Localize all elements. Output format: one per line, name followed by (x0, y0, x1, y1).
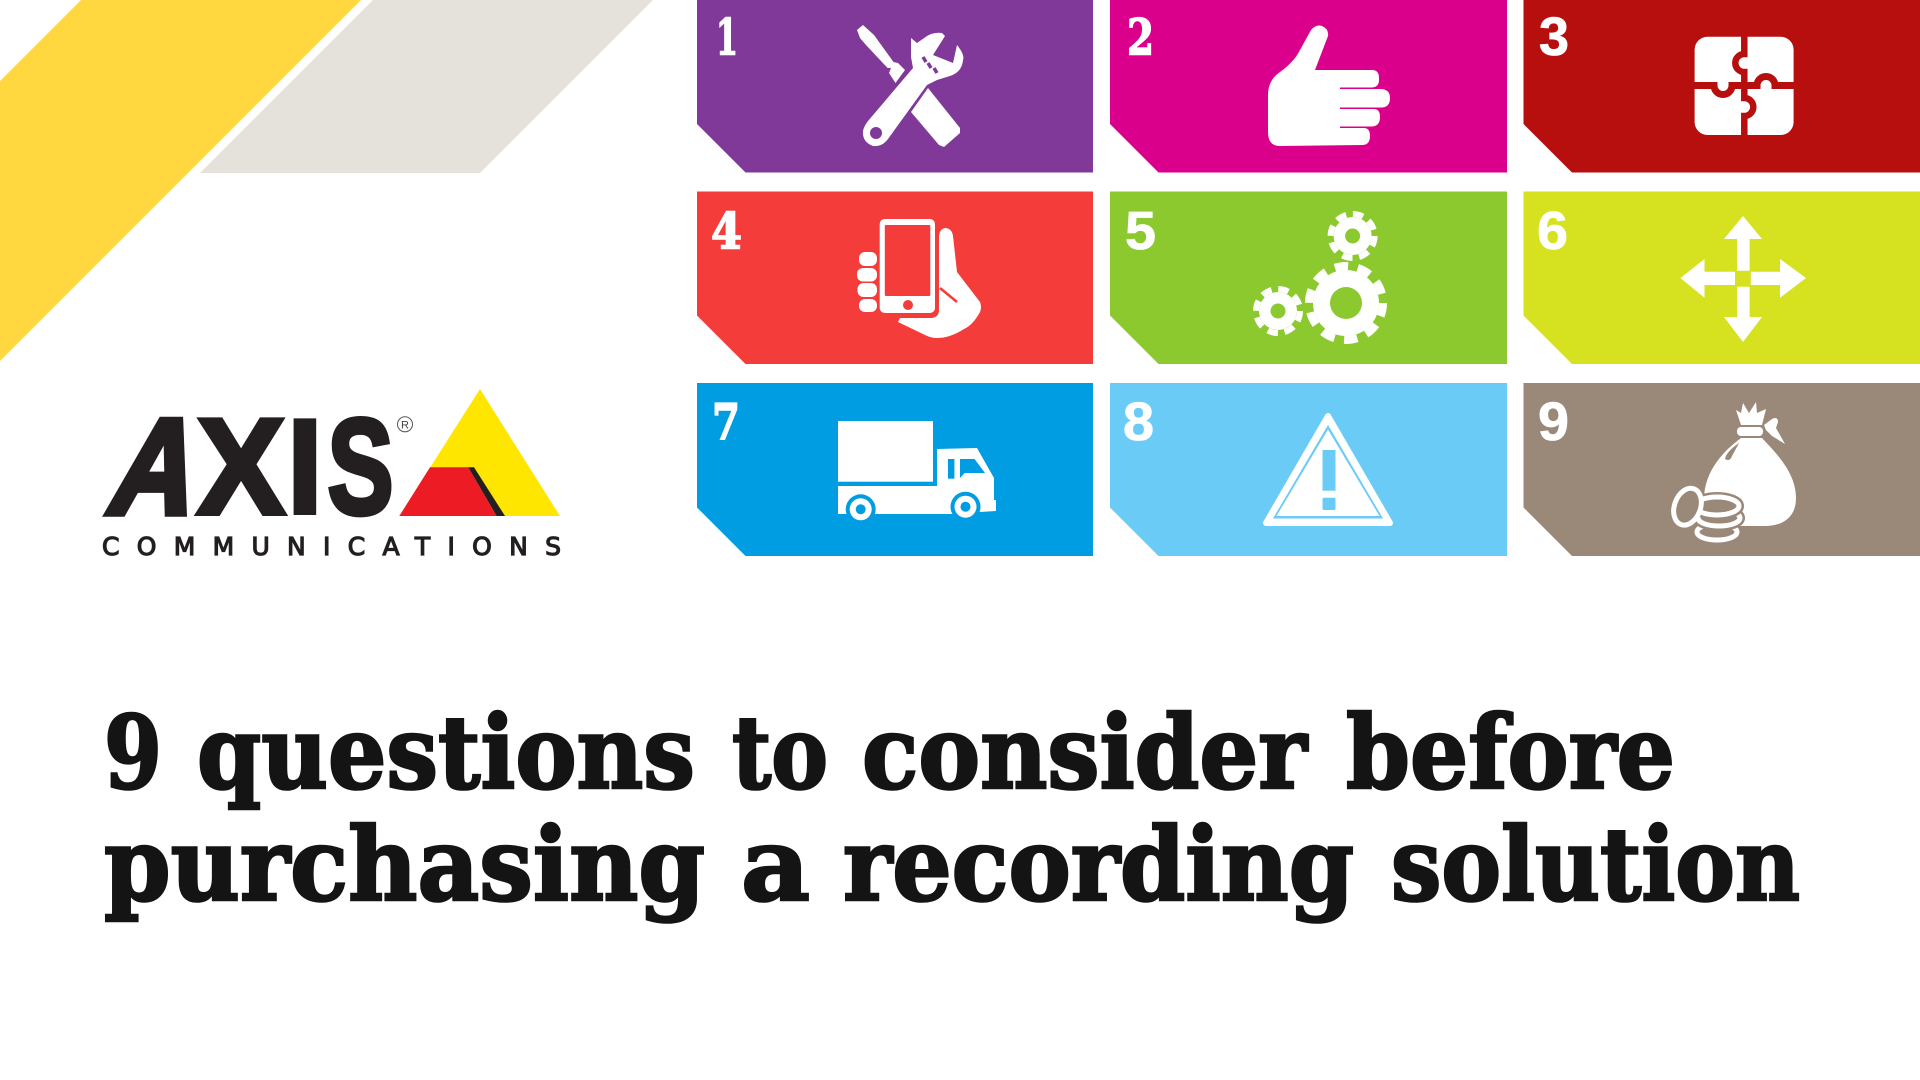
icon: thumb up hand (1268, 26, 1390, 146)
tile 5: gears (1110, 192, 1507, 364)
title line 2: recording (843, 805, 1354, 924)
icon: hand holding phone (857, 219, 981, 338)
icon: wrench and screwdriver (857, 25, 963, 147)
logo wordmark: I (286, 390, 324, 542)
logo triangle (399, 389, 560, 516)
title (104, 693, 1800, 924)
title line 2: purchasing (104, 805, 705, 924)
title line 1: consider (862, 693, 1309, 812)
logo: Axis Communications (96, 389, 561, 561)
yellow diagonal band (0, 0, 361, 361)
grey diagonal band (200, 0, 653, 173)
icon: truck (838, 421, 996, 524)
registered mark (398, 417, 412, 432)
number 6: 6 (1537, 201, 1568, 261)
title line 2: solution (1391, 805, 1800, 924)
logo wordmark: X (197, 390, 285, 542)
icon: puzzle pieces (1694, 36, 1794, 135)
number 9: 9 (1538, 392, 1569, 452)
registered mark: R (401, 420, 409, 432)
title line 2 (104, 805, 1800, 924)
title line 1: to (732, 693, 828, 812)
title line 1 (104, 693, 1675, 812)
title line 1: questions (197, 693, 695, 812)
title line 1: before (1346, 693, 1675, 812)
icon: warning triangle (1266, 416, 1390, 523)
icon: four-way arrows (1680, 216, 1806, 342)
logo wordmark: S (328, 390, 394, 542)
tile 2: thumbs up (1110, 0, 1507, 172)
tile 3: puzzle (1524, 0, 1920, 172)
number 1: 1 (716, 8, 738, 66)
icon: three gears (1256, 214, 1383, 340)
number 7: 7 (712, 392, 740, 452)
number 4: 4 (711, 202, 742, 260)
tile 8: warning (1110, 383, 1507, 556)
tile 7: delivery truck (697, 383, 1093, 556)
logo tagline: COMMUNICATIONS (102, 532, 561, 561)
tile 4: phone in hand (697, 192, 1093, 364)
icon: money bag and coins (1669, 402, 1796, 540)
number 3: 3 (1539, 7, 1569, 67)
logo wordmark: A (96, 392, 220, 543)
title line 2: a (741, 805, 810, 924)
title line 1: 9 (104, 693, 162, 812)
number 2: 2 (1127, 8, 1154, 66)
tile 6: move arrows (1524, 192, 1920, 364)
tile 1: tools (697, 0, 1093, 172)
tile 9: money bag (1524, 383, 1920, 556)
number 5: 5 (1125, 201, 1156, 261)
logo wordmark (96, 390, 393, 543)
number 8: 8 (1123, 392, 1154, 452)
